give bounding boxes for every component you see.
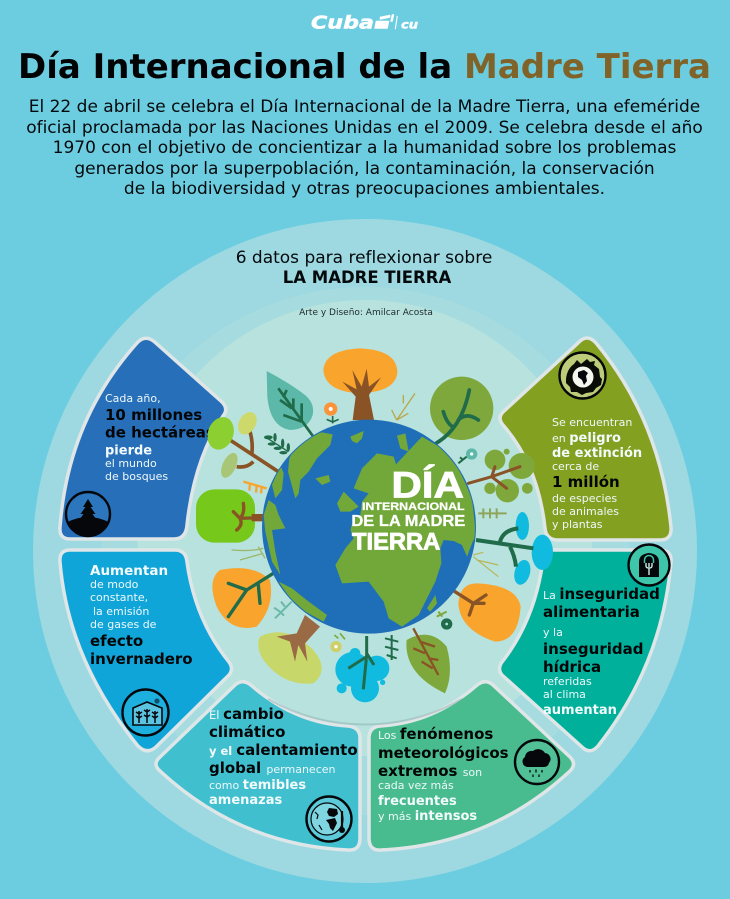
- intro paragraph: El 22 de abril se celebra el Día Internacional de la Madre Tierra, una efeméride: [29, 97, 700, 117]
- title: Día Internacional de la Madre Tierra: [18, 47, 711, 87]
- icon: earth with animals: [560, 352, 606, 398]
- icon: pine tree: [66, 492, 110, 536]
- credit: Arte y Diseño: Amilcar Acosta: [299, 308, 433, 318]
- icon: greenhouse: [122, 690, 168, 736]
- tree: upper left small leaves: [203, 409, 278, 480]
- globe label: DÍA: [391, 463, 464, 505]
- panel: peligro de extinción: Se encuentran: [552, 416, 632, 429]
- tree: orange lower right: [455, 583, 521, 642]
- panel: cambio climático: y el calentamiento: [209, 741, 358, 759]
- tree: bottom blue: [335, 636, 389, 702]
- globe: [262, 420, 476, 634]
- panel: inseguridad alimentaria: aumentan: [543, 703, 617, 718]
- panel: gases de efecto invernadero: de modo: [90, 578, 139, 591]
- panel: bosques: el mundo: [105, 457, 157, 470]
- logo: [311, 12, 418, 34]
- illustration: globe and trees: [196, 348, 553, 702]
- panel: fenómenos meteorológicos: [369, 682, 574, 850]
- tree: blue right: [476, 512, 553, 587]
- globe label: DE LA MADRE: [351, 513, 466, 530]
- tree: teal leaf: [267, 371, 313, 437]
- globe label: INTERNACIONAL: [362, 501, 465, 513]
- intro paragraph: [26, 97, 703, 199]
- panel: inseguridad alimentaria: [500, 544, 671, 751]
- panel: gases de efecto invernadero: [60, 550, 231, 751]
- panel: peligro de extinción: y plantas: [552, 518, 603, 531]
- panel: peligro de extinción: en peligro: [552, 431, 621, 446]
- panel: fenómenos meteorológicos: meteorológicos: [378, 744, 509, 762]
- panel: gases de efecto invernadero: invernadero: [90, 650, 193, 668]
- outer circle background: [33, 219, 697, 883]
- panel: peligro de extinción: de extinción: [552, 446, 642, 461]
- middle ring: [101, 287, 629, 815]
- intro paragraph: generados por la superpoblación, la contaminación, la conservación: [74, 159, 655, 179]
- panel: gases de efecto invernadero: Aumentan: [90, 563, 168, 579]
- panel: inseguridad alimentaria: hídrica: [543, 658, 601, 676]
- panel: peligro de extinción: cerca de: [552, 460, 599, 473]
- panel: bosques: [60, 338, 226, 539]
- panel: fenómenos meteorológicos: cada vez más: [378, 779, 454, 792]
- logo: cu: [401, 18, 418, 32]
- panel: inseguridad alimentaria: al clima: [543, 688, 586, 701]
- panel: gases de efecto invernadero: constante,: [90, 591, 148, 604]
- panel: bosques: de bosques: [105, 470, 168, 483]
- tree: left bright green: [196, 489, 263, 543]
- intro paragraph: 1970 con el objetivo de concientizar a la humanidad sobre los problemas: [53, 138, 677, 158]
- intro paragraph: oficial proclamada por las Naciones Unidas en el 2009. Se celebra desde el año: [26, 118, 703, 138]
- panel: bosques: 10 millones: [105, 406, 202, 424]
- subtitle: LA MADRE TIERRA: [283, 268, 451, 287]
- panel: peligro de extinción: [500, 338, 671, 540]
- panel: bosques: pierde: [105, 444, 152, 458]
- panel: cambio climático: [156, 682, 360, 850]
- panel: cambio climático: global permanecen: [209, 759, 336, 777]
- intro paragraph: de la biodiversidad y otras preocupaciones ambientales.: [124, 179, 605, 199]
- logo: Cuba: [311, 12, 374, 34]
- panel: inseguridad alimentaria: inseguridad: [543, 640, 643, 658]
- panel: peligro de extinción: de animales: [552, 505, 619, 518]
- panel: cambio climático: climático: [209, 723, 285, 741]
- globe label: TIERRA: [352, 529, 440, 555]
- panel: fenómenos meteorológicos: Los fenómenos: [378, 725, 493, 743]
- panel: inseguridad alimentaria: La inseguridad: [543, 585, 660, 603]
- panel: gases de efecto invernadero: efecto: [90, 632, 143, 650]
- tree: top orange: [323, 348, 397, 420]
- icon: globe with thermometer: [306, 796, 352, 842]
- icon: padlock with fork: [628, 544, 670, 586]
- panel: peligro de extinción: de especies: [552, 492, 617, 505]
- leaf: bottom right: [406, 628, 450, 693]
- panel: fenómenos meteorológicos: extremos son: [378, 762, 482, 780]
- panel: inseguridad alimentaria: y la: [543, 626, 563, 639]
- panel: cambio climático: El cambio: [209, 705, 284, 723]
- panel: inseguridad alimentaria: alimentaria: [543, 603, 640, 621]
- tree: left orange: [212, 568, 273, 628]
- tree: bottom left pale green: [258, 615, 322, 684]
- panel: fenómenos meteorológicos: y más intensos: [378, 809, 477, 824]
- panel: gases de efecto invernadero: de gases de: [90, 618, 157, 631]
- subtitle: 6 datos para reflexionar sobre: [236, 248, 492, 268]
- panel: inseguridad alimentaria: referidas: [543, 675, 592, 688]
- panel: peligro de extinción: 1 millón: [552, 473, 620, 491]
- globe label: [351, 463, 466, 555]
- panel: fenómenos meteorológicos: frecuentes: [378, 794, 457, 809]
- icon: storm cloud: [515, 740, 559, 784]
- small decorative sprigs and flowers: [232, 393, 507, 660]
- subtitle: [236, 248, 492, 287]
- inner pale disc: [137, 300, 593, 756]
- tree: round green: [430, 377, 493, 443]
- panel: bosques: de hectáreas: [105, 424, 215, 442]
- tree: cluster right: [468, 449, 535, 502]
- panel: cambio climático: amenazas: [209, 793, 283, 808]
- panel: bosques: Cada año,: [105, 392, 161, 405]
- panel: gases de efecto invernadero: la emisión: [93, 605, 149, 618]
- panel: cambio climático: como temibles: [209, 778, 306, 793]
- centre disc shadow: [268, 699, 462, 725]
